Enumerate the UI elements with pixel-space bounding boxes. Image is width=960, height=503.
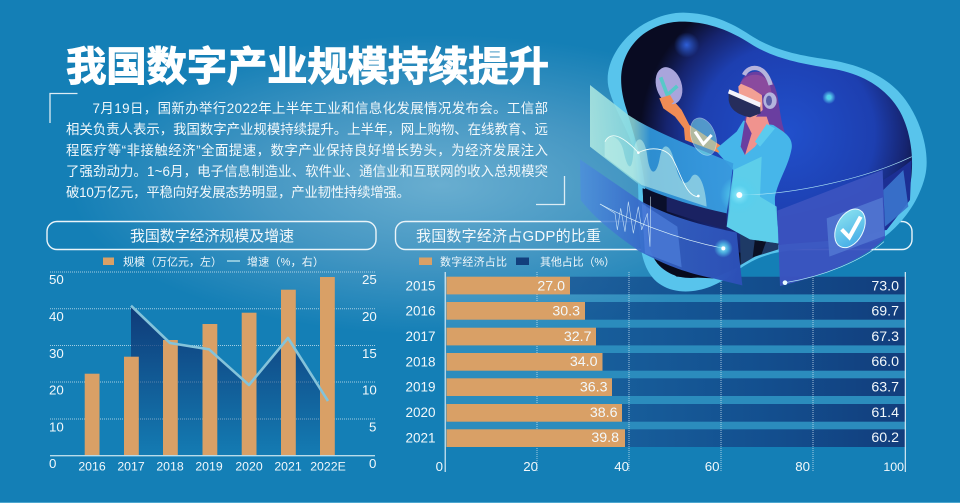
stacked bars: digital economy share [446, 277, 625, 447]
coat [717, 121, 792, 243]
right sub panel [827, 197, 884, 257]
right axis labels [362, 272, 377, 471]
intro paragraph: 了强劲动力。1~6月，电子信息制造业、软件业、通信业和互联网的收入总规模突 [66, 163, 548, 179]
year labels [78, 460, 346, 474]
bottom edge [0, 502, 960, 503]
raised hand disk [651, 64, 687, 108]
left axis labels: 40 [49, 309, 64, 324]
glow node small [783, 280, 787, 285]
corner bracket: top left [50, 94, 78, 123]
panel: digital economy share of GDP [396, 222, 912, 474]
line chart: growth [131, 306, 328, 401]
value labels: other share: 66.0 [871, 354, 899, 370]
right axis labels: 15 [362, 346, 377, 361]
headband [744, 68, 771, 85]
growth area under line [131, 306, 328, 456]
legend: scale and growth: 规模（万亿元，左） [123, 254, 222, 268]
glow node centre [720, 176, 759, 214]
face [738, 81, 763, 117]
stacked bars: other share [570, 277, 905, 447]
value labels: other share: 69.7 [871, 304, 899, 320]
intro paragraph: 程医疗等“非接触经济”全面提速，数字产业保持良好增长势头，为经济发展注入 [66, 142, 548, 158]
intro paragraph: 破10万亿元，平稳向好发展态势明显，产业韧性持续增强。 [66, 185, 410, 200]
year labels: 2015 [406, 278, 436, 294]
dim star [674, 32, 699, 58]
year labels: 2016 [406, 304, 436, 318]
left axis labels: 20 [49, 382, 64, 398]
heartbeat line [600, 197, 651, 247]
value labels: digital share [537, 278, 619, 446]
panel: digital economy scale and growth [47, 222, 377, 474]
hair back [741, 72, 785, 153]
year labels [406, 278, 436, 446]
year labels: 2017 [117, 460, 145, 474]
x axis labels: 20 [523, 459, 538, 474]
right axis labels: 10 [362, 382, 377, 398]
x axis labels [436, 459, 904, 474]
year labels: 2021 [406, 430, 436, 446]
value labels: digital share: 39.8 [591, 430, 619, 446]
platform right side [780, 160, 912, 245]
year labels: 2022E [310, 460, 346, 474]
intro text block [50, 94, 564, 204]
year labels: 2019 [406, 380, 436, 394]
year labels: 2019 [195, 460, 223, 474]
lower left panel [580, 159, 742, 285]
bar chart: scale [85, 277, 335, 456]
right panel [777, 170, 885, 286]
year labels: 2020 [406, 405, 436, 420]
x axis labels: 40 [614, 459, 629, 474]
x axis labels: 60 [705, 459, 720, 474]
arc line [739, 157, 912, 283]
legend: scale and growth [103, 254, 324, 268]
value labels: other share: 61.4 [871, 405, 899, 421]
dark inner blob [621, 22, 912, 278]
dark platform side [643, 188, 727, 230]
value labels: other share: 63.7 [871, 380, 899, 396]
heading pill: scale and growth [47, 222, 376, 250]
value labels: digital share: 32.7 [564, 329, 592, 345]
x axis labels: 80 [795, 459, 810, 474]
year labels: 2020 [235, 460, 263, 474]
value labels: digital share: 30.3 [552, 304, 580, 320]
collar and neck [742, 117, 770, 155]
raised arm [659, 97, 725, 153]
value labels: other share: 73.0 [871, 278, 899, 294]
platform lower black edge [647, 233, 743, 278]
legend: share of GDP: 其他占比（%） [540, 254, 615, 268]
intro paragraph [66, 100, 548, 200]
right axis labels: 0 [369, 456, 376, 471]
lower left sub panel [642, 203, 682, 267]
legs [740, 233, 778, 265]
wave chart [605, 136, 707, 207]
left axis labels: 10 [49, 420, 64, 434]
year labels: 2021 [274, 460, 302, 474]
ear cup [763, 92, 777, 109]
year labels: 2018 [406, 354, 436, 370]
year labels: 2016 [78, 460, 106, 474]
legend: share of GDP [419, 254, 615, 268]
outer blob [608, 13, 927, 291]
legend: share of GDP: 数字经济占比 [440, 254, 507, 268]
heading pill: share of GDP: 我国数字经济占GDP的比重 [416, 228, 601, 245]
value labels: digital share: 38.6 [590, 405, 618, 421]
heading pill: share of GDP [396, 222, 912, 250]
right axis labels: 20 [362, 309, 377, 324]
heading pill: scale and growth: 我国数字经济规模及增速 [130, 228, 294, 245]
year labels: 2018 [156, 460, 184, 474]
corner bracket: bottom right [536, 176, 564, 204]
right outer panel [883, 170, 908, 227]
value labels: other share: 60.2 [871, 430, 899, 446]
lower hand badge [685, 114, 721, 159]
light band behind bars [446, 277, 905, 447]
value labels: digital share: 27.0 [537, 278, 565, 294]
illustration: woman in VR headset on digital platform [580, 13, 927, 291]
left axis labels: 0 [49, 456, 56, 471]
value labels: digital share: 36.3 [580, 380, 608, 396]
value labels: other share: 67.3 [871, 329, 899, 345]
right axis labels: 5 [369, 420, 376, 434]
x axis labels: 100 [883, 460, 904, 474]
VR visor [729, 92, 761, 117]
x axis labels: 0 [436, 459, 443, 474]
legend: scale and growth: 增速（%，右） [247, 254, 324, 268]
left axis labels: 50 [49, 272, 64, 287]
intro paragraph: 相关负责人表示，我国数字产业规模持续提升。上半年，网上购物、在线教育、远 [66, 122, 548, 137]
check badge [829, 204, 871, 253]
value labels: digital share: 34.0 [570, 354, 598, 370]
right axis labels: 25 [362, 272, 377, 287]
glow node [714, 239, 733, 258]
cyan star [822, 91, 836, 104]
title: 我国数字产业规模持续提升 [66, 34, 549, 92]
left axis labels: 30 [49, 346, 64, 361]
year labels: 2017 [406, 329, 436, 344]
wave chart panel [590, 85, 733, 213]
hair top [740, 75, 772, 95]
left axis labels [49, 272, 64, 471]
intro paragraph: 7月19日，国新办举行2022年上半年工业和信息化发展情况发布会。工信部 [92, 100, 548, 116]
value labels: other share [871, 278, 899, 446]
